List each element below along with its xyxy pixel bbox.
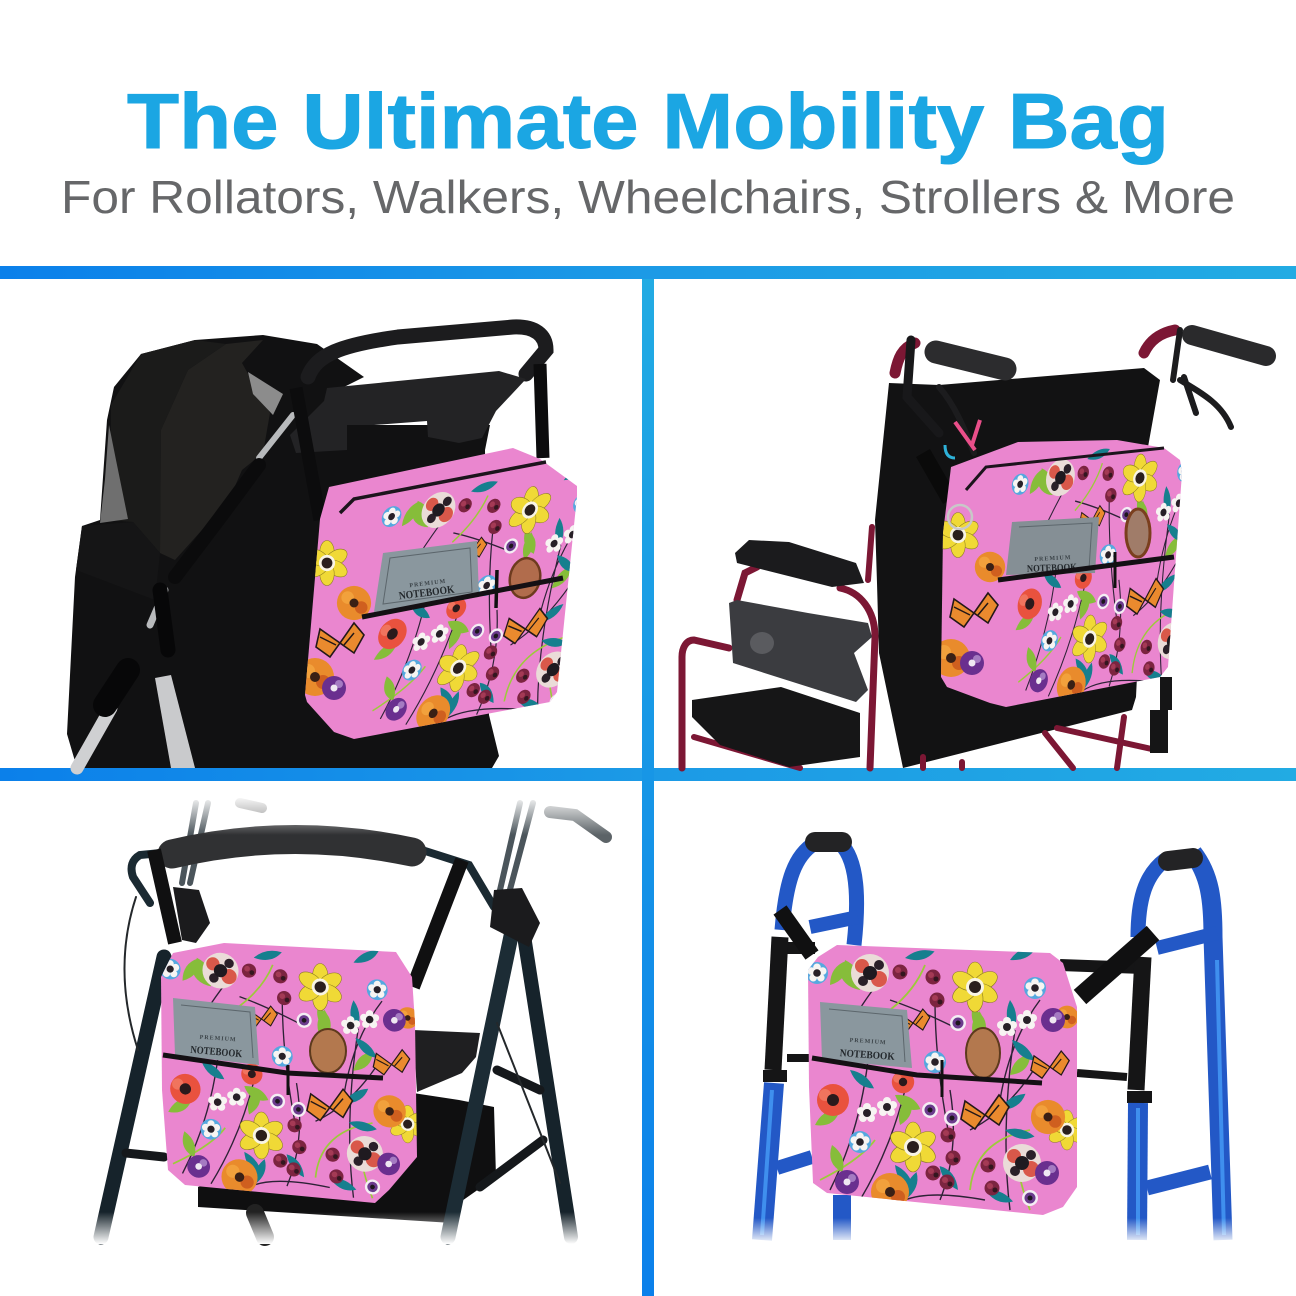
straps — [154, 850, 462, 987]
panel: stroller — [67, 327, 634, 768]
walker black frame — [763, 937, 1152, 1097]
stroller handle — [308, 327, 546, 377]
seat — [413, 1030, 480, 1092]
notebook: PREMIUM — [199, 1035, 237, 1043]
rear basket — [198, 1093, 496, 1223]
right hinge — [490, 888, 540, 947]
subtitle: For Rollators, Walkers, Wheelchairs, Strollers & More — [61, 171, 1235, 223]
red tubing — [682, 330, 1175, 768]
stroller body and canopy — [67, 335, 499, 768]
logo blue mark — [945, 445, 955, 458]
panel: walker — [740, 842, 1240, 1244]
logo marks — [955, 420, 980, 450]
notebook — [1006, 517, 1099, 575]
top divider bar — [0, 266, 1296, 279]
left hinge — [173, 887, 210, 943]
notebook — [820, 1002, 912, 1068]
panel badge — [750, 632, 774, 654]
pocket — [998, 557, 1174, 580]
notebook: NOTEBOOK — [1027, 562, 1077, 575]
bag — [305, 448, 577, 739]
notebook: NOTEBOOK — [190, 1045, 243, 1060]
straps — [780, 910, 812, 955]
glasses — [310, 1029, 346, 1073]
pocket — [362, 578, 563, 617]
notebook: PREMIUM — [1034, 555, 1072, 563]
latches — [1150, 677, 1172, 753]
silver folded tube — [155, 675, 195, 768]
fade bottom — [80, 1212, 600, 1244]
vertical divider bar — [642, 279, 654, 1296]
pen — [1114, 552, 1116, 588]
fade bottom — [740, 1218, 1240, 1244]
frame — [101, 803, 606, 1237]
bag — [160, 941, 427, 1203]
pen — [496, 570, 497, 608]
walker grips — [815, 842, 1193, 861]
glasses — [506, 555, 544, 601]
keyring — [948, 505, 972, 529]
bag — [941, 440, 1182, 707]
stroller frame — [77, 415, 293, 768]
notebook: PREMIUM — [409, 579, 447, 589]
pocket — [163, 1055, 383, 1078]
middle divider bar — [0, 768, 1296, 781]
right strap — [1080, 933, 1153, 997]
handle foam — [172, 839, 412, 854]
notebook: NOTEBOOK — [398, 584, 456, 602]
pen — [286, 1065, 290, 1095]
hand grips — [907, 330, 1266, 453]
notebook: PREMIUM — [849, 1038, 887, 1046]
seat — [692, 687, 860, 767]
armrest — [735, 540, 864, 587]
glasses — [966, 1028, 1000, 1078]
notebook — [374, 541, 479, 612]
glasses — [1126, 509, 1150, 557]
stroller tray — [290, 371, 526, 453]
pocket — [812, 1058, 1042, 1083]
wheelchair back — [875, 368, 1160, 768]
notebook — [173, 998, 259, 1065]
walker blue tubes — [762, 843, 1223, 1240]
panel: rollator — [80, 795, 630, 1244]
side panel — [729, 600, 872, 702]
bag — [806, 944, 1088, 1215]
title: The Ultimate Mobility Bag — [127, 77, 1169, 165]
pen — [940, 1060, 944, 1097]
strap — [923, 453, 950, 500]
notebook: NOTEBOOK — [839, 1048, 896, 1063]
panel: wheelchair — [682, 330, 1266, 768]
walker tube highlights — [762, 960, 1224, 1235]
fade top — [170, 795, 630, 835]
straps — [296, 364, 543, 520]
